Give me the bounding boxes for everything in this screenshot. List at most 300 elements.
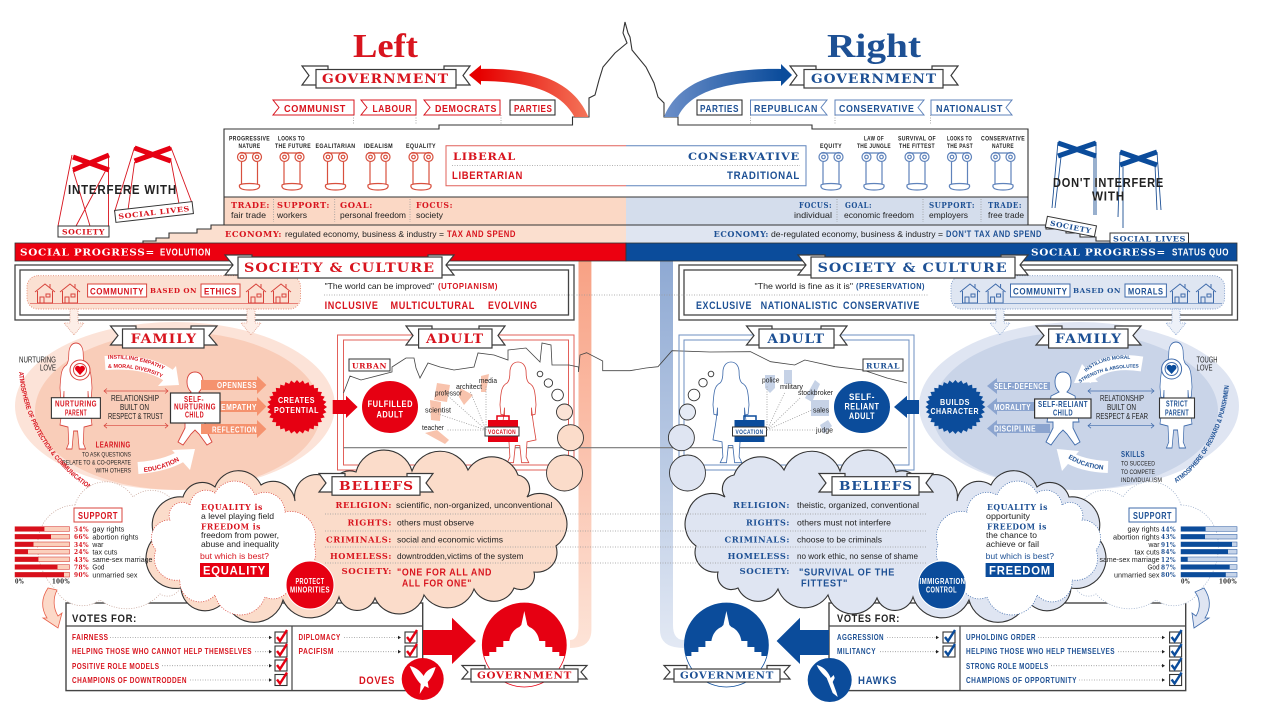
banner: right bottom government [664, 666, 790, 682]
support chart right: abortion rights [1113, 532, 1160, 541]
self-reliant child box [1035, 399, 1091, 418]
value arrows: openness, empathy, reflection: OPENNESS [217, 380, 257, 390]
vocation spokes and labels: military [780, 382, 803, 391]
learning text: TO ASK QUESTIONS [82, 452, 131, 459]
value arrows: self-defence, morality, discipline [987, 378, 1050, 437]
left salmon stripe [570, 261, 591, 648]
support chart right: 43% [1161, 533, 1176, 541]
self-reliant child box: SELF-RELIANT [1038, 399, 1088, 409]
value arrows: openness, empathy, reflection: REFLECTION [212, 424, 257, 434]
relationship text with arrows: BUILT ON [1107, 403, 1136, 412]
social progress bar: SOCIAL PROGRESS= [1031, 248, 1166, 258]
left beliefs text: HOMELESS: [330, 551, 392, 561]
right equality text: EQUALITY is [987, 503, 1048, 513]
adult figure with vocation: VOCATION [736, 430, 764, 436]
support chart left: abortion rights [92, 532, 139, 541]
right votes box: HAWKS [858, 675, 897, 687]
right votes box [808, 603, 1186, 702]
right society panel [679, 265, 1238, 320]
skills text [1121, 449, 1162, 484]
dotted arrows from community to family, left [64, 309, 261, 335]
right policy band: GOAL: [845, 200, 872, 210]
arrow: education: EDUCATION [144, 457, 180, 472]
banner: right bottom government: GOVERNMENT [680, 671, 774, 682]
ideology box: TRADITIONAL [727, 170, 800, 182]
vocation shapes [425, 374, 489, 444]
support chart right: 87% [1161, 564, 1176, 572]
support chart left: 0% [15, 578, 24, 586]
right votes box: UPHOLDING ORDER [966, 632, 1036, 642]
self-nurturing child box: NURTURING [174, 403, 216, 412]
support chart left: 54% [74, 526, 89, 534]
arrow: curved blue to right government [664, 64, 792, 117]
nurturing love label [19, 356, 56, 373]
right columns with labels: THE PAST [947, 143, 973, 150]
nurturing love label: LOVE [40, 364, 56, 373]
value arrows: self-defence, morality, discipline: SELF-DEFENCE [994, 381, 1048, 391]
ideology box: LIBERTARIAN [452, 170, 523, 182]
left society panel: INCLUSIVE [325, 300, 379, 312]
relationship text with arrows: RELATIONSHIP [111, 394, 159, 403]
left columns with labels [229, 136, 436, 190]
ideology box: LIBERAL [453, 152, 516, 163]
arrow: to self-reliant adult [894, 396, 919, 418]
banner: left government: GOVERNMENT [322, 72, 449, 87]
relationship text with arrows [1088, 388, 1154, 428]
banner: left society and culture: SOCIETY & CULTURE [244, 261, 435, 276]
right beliefs text: RIGHTS: [746, 518, 790, 528]
support chart left [15, 508, 152, 586]
parent figure: strict [1160, 342, 1192, 448]
badge: protect minorities: MINORITIES [290, 586, 330, 594]
right columns with labels: THE FITTEST [899, 143, 935, 150]
vocation spokes and labels: police [762, 376, 780, 385]
right policy band: individual [794, 210, 832, 220]
banner: left beliefs: BELIEFS [339, 478, 414, 493]
right policy band: economic freedom [844, 210, 914, 220]
self-reliant adult circle: ADULT [849, 411, 875, 422]
value arrows: openness, empathy, reflection: EMPATHY [221, 402, 257, 412]
support chart left: 90% [74, 571, 89, 579]
arrow: right support to votes [1192, 588, 1209, 628]
right votes box: HELPING THOSE WHO HELP THEMSELVES [966, 646, 1115, 656]
right adult panel [679, 335, 914, 470]
atmosphere text: ATMOSPHERE OF REWARD & PUNISHMENT [1174, 386, 1229, 483]
left beliefs cloud [146, 450, 567, 622]
right beliefs text: RELIGION: [733, 500, 790, 510]
left scaffold: interfere with society and social lives: INTERFERE WITH [68, 182, 177, 197]
support chart left: God [92, 563, 104, 572]
right equality text: achieve or fail [986, 539, 1039, 549]
left votes box: FAIRNESS [72, 632, 108, 642]
right party labels: PARTIES [700, 103, 739, 115]
right equality text [986, 503, 1054, 578]
vocation spokes and labels: scientist [425, 406, 452, 415]
rural label [863, 359, 903, 371]
right party labels: NATIONALIST [936, 103, 1003, 115]
right society panel: BASED ON [1073, 287, 1121, 295]
vocation spokes and labels: media [479, 376, 498, 385]
banner: left bottom government [462, 666, 587, 682]
right policy band: SUPPORT: [929, 200, 975, 210]
atmosphere text: ATMOSPHERE OF PROTECTION & COMMUNICATION [19, 372, 92, 488]
support chart right: 84% [1161, 548, 1176, 556]
support chart right [1100, 508, 1237, 586]
right policy band: employers [929, 210, 968, 220]
badge: builds character: CHARACTER [930, 406, 979, 416]
learning text: WITH OTHERS [96, 468, 131, 474]
vocation shapes [765, 370, 832, 434]
right votes box: CHAMPIONS OF OPPORTUNITY [966, 675, 1077, 685]
left party labels: DEMOCRATS [435, 103, 497, 115]
arrow: instilling empathy: & MORAL DIVERSITY [108, 364, 164, 378]
skills text: INDIVIDUALISM [1121, 477, 1162, 484]
right government dome [684, 603, 768, 688]
support chart left: 34% [74, 541, 89, 549]
badge: creates potential [262, 375, 332, 439]
adult figure with vocation: VOCATION [488, 430, 516, 436]
adult figure with vocation [485, 362, 536, 463]
support chart left: war [91, 540, 104, 549]
right beliefs text: no work ethic, no sense of shame [797, 551, 918, 561]
left beliefs text: RELIGION: [336, 500, 392, 510]
vocation spokes and labels: judge [815, 426, 833, 435]
left equality text: abuse and inequality [201, 539, 280, 549]
support chart right: unmarried sex [1114, 570, 1160, 579]
badge: builds character [920, 375, 991, 439]
strict parent box: PARENT [1165, 408, 1189, 418]
left policy band: society [416, 210, 444, 220]
banner: left family: FAMILY [131, 332, 197, 347]
left equality text: FREEDOM is [201, 523, 261, 533]
right columns with labels: LOOKS TO [947, 136, 972, 143]
left beliefs text: SOCIETY: [342, 566, 392, 576]
right society panel: COMMUNITY [1013, 286, 1068, 298]
banner: right society and culture: SOCIETY & CULTURE [818, 261, 1008, 276]
left scaffold: interfere with society and social lives: SOCIAL LIVES [118, 204, 190, 221]
support chart right: war [1148, 540, 1160, 549]
left equality text [200, 503, 280, 578]
support chart right: gay rights [1128, 525, 1160, 534]
right family diagram [987, 342, 1229, 484]
icon: hawk [808, 658, 852, 702]
banner: left society and culture [225, 255, 454, 278]
banner: right beliefs [819, 474, 933, 495]
left policy band: GOAL: [340, 200, 373, 210]
left columns with labels: NATURE [238, 143, 260, 150]
arrow: instilling moral strength [1074, 355, 1144, 384]
right economy line: ECONOMY: [714, 229, 769, 239]
rural label: RURAL [866, 362, 900, 370]
relationship text with arrows: RESPECT & TRUST [108, 412, 163, 421]
support chart right: tax cuts [1134, 547, 1160, 556]
left beliefs text: RIGHTS: [348, 518, 392, 528]
support chart left: gay rights [92, 525, 125, 534]
left columns with labels: THE FUTURE [275, 143, 311, 150]
left votes box: DIPLOMACY [298, 632, 341, 642]
right columns with labels: EQUITY [820, 143, 842, 150]
vocation spokes and labels: professor [435, 389, 462, 398]
right columns with labels [819, 136, 1025, 190]
left equality text: a level playing field [201, 511, 274, 521]
left beliefs text [326, 500, 553, 590]
right economy line [714, 229, 1042, 239]
left thought bubbles [537, 371, 584, 491]
left beliefs text: downtrodden,victims of the system [397, 551, 524, 561]
left policy band: SUPPORT: [277, 200, 330, 210]
arrow: instilling empathy: INSTILLING EMPATHY [108, 355, 165, 370]
right beliefs text: FITTEST" [801, 579, 848, 590]
dotted belief dividers [325, 514, 927, 563]
support chart left: 100% [52, 578, 70, 586]
left society panel: BASED ON [150, 287, 197, 295]
right beliefs text: CRIMINALS: [724, 535, 790, 545]
left equality text: but which is best? [200, 551, 269, 561]
support chart right: 44% [1161, 526, 1176, 534]
left policy band: FOCUS: [416, 200, 453, 210]
urban label: URBAN [352, 362, 387, 370]
support chart left: SUPPORT [78, 510, 118, 522]
right votes box: AGGRESSION [837, 632, 884, 642]
arrow: curved red to left government [469, 65, 588, 117]
right party labels [697, 100, 1012, 125]
left support cloud [38, 482, 179, 609]
left society panel: EVOLVING [488, 300, 538, 312]
banner: left adult: ADULT [425, 332, 484, 347]
social progress bar: EVOLUTION [160, 248, 211, 258]
capitol building outline with bands [143, 22, 1110, 243]
skills text: SKILLS [1121, 449, 1145, 459]
banner: right adult: ADULT [766, 332, 825, 347]
vocation spokes and labels: teacher [422, 423, 444, 432]
right columns with labels: NATURE [992, 143, 1014, 150]
arrow: education [1056, 449, 1108, 473]
left economy line: TAX AND SPEND [447, 229, 516, 239]
support chart left: unmarried sex [92, 570, 138, 579]
right blue stripe [660, 261, 684, 648]
ideology box: CONSERVATIVE [688, 152, 800, 163]
arrow: right votes to government [777, 618, 829, 664]
right society panel: NATIONALISTIC [761, 300, 838, 312]
value arrows: self-defence, morality, discipline: MORALITY [994, 402, 1031, 412]
left equality text: EQUALITY [203, 564, 266, 578]
left policy band: workers [276, 210, 307, 220]
banner: left government [302, 66, 470, 88]
left beliefs text: social and economic victims [397, 535, 503, 545]
right votes box: STRONG ROLE MODELS [966, 661, 1049, 671]
right scaffold: don't interfere with society and social lives [1045, 142, 1188, 244]
right beliefs text: "SURVIVAL OF THE [799, 568, 895, 579]
left policy band [231, 199, 453, 222]
left columns with labels: PROGRESSIVE [229, 136, 270, 143]
right society panel: "The world is fine as it is" [754, 281, 853, 291]
right support cloud [1077, 482, 1218, 609]
badge: creates potential: CREATES [278, 395, 315, 405]
support chart right: 80% [1161, 571, 1176, 579]
right beliefs text: theistic, organized, conventional [797, 500, 919, 510]
right beliefs text: HOMELESS: [728, 551, 790, 561]
left votes box: POSITIVE ROLE MODELS [72, 661, 160, 671]
right economy line: DON'T TAX AND SPEND [946, 229, 1042, 239]
right party labels: CONSERVATIVE [839, 103, 914, 115]
banner: left beliefs [319, 474, 433, 495]
left economy line: regulated economy, business & industry = [285, 229, 444, 239]
right columns with labels: THE JUNGLE [857, 143, 891, 150]
left economy line [225, 229, 516, 239]
support chart right: 12% [1161, 556, 1176, 564]
left votes box: PACIFISM [298, 646, 334, 656]
self-reliant adult circle: SELF- [849, 392, 875, 403]
right beliefs text: others must not interfere [797, 518, 891, 528]
right scaffold: don't interfere with society and social lives: SOCIETY [1049, 219, 1093, 236]
arrow: education [138, 449, 195, 474]
left society panel: MULTICULTURAL [390, 300, 475, 312]
left beliefs text: CRIMINALS: [326, 535, 392, 545]
self-nurturing child box [170, 393, 220, 423]
arrow: left votes to government [423, 618, 476, 664]
right beliefs cloud [685, 450, 1106, 622]
right beliefs text [724, 500, 919, 590]
left votes box: HELPING THOSE WHO CANNOT HELP THEMSELVES [72, 646, 252, 656]
tough love label [1196, 356, 1218, 373]
left columns with labels: EQUALITY [406, 143, 436, 150]
left society panel [15, 265, 574, 320]
support chart right: SUPPORT [1133, 510, 1172, 522]
right beliefs text: SOCIETY: [740, 566, 790, 576]
support chart left: 24% [74, 548, 89, 556]
self-reliant adult circle: RELIANT [844, 402, 880, 412]
badge: creates potential: POTENTIAL [274, 405, 319, 415]
self-reliant child box: CHILD [1053, 408, 1073, 418]
badge: builds character: BUILDS [940, 397, 970, 407]
left equality text: freedom from power, [201, 530, 279, 540]
right society panel: CONSERVATIVE [843, 300, 920, 312]
learning text: RELATE TO & CO-OPERATE [62, 460, 131, 466]
left beliefs text: ALL FOR ONE" [402, 579, 472, 590]
child figure [178, 372, 212, 445]
title: Right: Right [827, 28, 922, 65]
value arrows: openness, empathy, reflection [201, 376, 266, 438]
right equality text: but which is best? [986, 551, 1054, 561]
right scaffold: don't interfere with society and social lives: DON'T INTERFERE [1053, 175, 1164, 190]
nurturing love label: NURTURING [19, 356, 56, 365]
banner: right society and culture [798, 255, 1028, 278]
urban label [349, 359, 390, 371]
badge: protect minorities [286, 561, 334, 609]
left votes box: CHAMPIONS OF DOWNTRODDEN [72, 675, 187, 685]
right society panel: EXCLUSIVE [696, 300, 752, 312]
right equality cloud [936, 481, 1101, 615]
badge: immigration control [918, 561, 966, 609]
tough love label: TOUGH [1196, 356, 1218, 365]
title: Left: Left [353, 28, 419, 65]
left columns with labels: IDEALISM [364, 143, 393, 150]
arrow: instilling moral strength: INSTILLING MORAL [1084, 356, 1130, 372]
badge: protect minorities: PROTECT [296, 577, 324, 586]
left society panel: "The world can be improved" [325, 281, 434, 291]
right policy band: TRADE: [988, 200, 1022, 210]
skills text: TO COMPETE [1121, 469, 1155, 476]
right policy band [794, 199, 1024, 222]
arrow: education: EDUCATION [1068, 454, 1104, 470]
left equality text: EQUALITY is [201, 503, 263, 513]
right scaffold: don't interfere with society and social lives: SOCIAL LIVES [1113, 234, 1186, 244]
right equality text: FREEDOM is [987, 523, 1047, 533]
social progress bar: SOCIAL PROGRESS= [20, 248, 155, 258]
banner: left adult [406, 326, 505, 348]
support chart right: same-sex marriage [1100, 555, 1160, 564]
left party labels: PARTIES [514, 103, 552, 115]
vocation spokes and labels [762, 376, 833, 435]
left party labels: COMMUNIST [284, 103, 346, 115]
right family ellipse [919, 322, 1239, 490]
right equality text: the chance to [986, 530, 1037, 540]
right economy line: de-regulated economy, business & industry = [771, 229, 943, 239]
badge: immigration control: IMMIGRATION [920, 577, 966, 586]
vocation spokes and labels: stockbroker [798, 388, 833, 397]
relationship text with arrows [104, 388, 168, 428]
icon: dove [402, 658, 444, 700]
banner: left bottom government: GOVERNMENT [477, 671, 572, 682]
vocation spokes and labels: sales [813, 406, 829, 415]
left society panel: (UTOPIANISM) [438, 281, 498, 291]
left society panel: COMMUNITY [90, 286, 144, 298]
support chart left: 43% [74, 556, 89, 564]
self-reliant adult circle [834, 381, 890, 433]
right society panel: (PRESERVATION) [856, 281, 925, 291]
support chart left: 66% [74, 533, 89, 541]
left policy band: TRADE: [231, 200, 270, 210]
dotted arrows from community to family, right [990, 309, 1186, 335]
right votes box: MILITANCY [837, 646, 876, 656]
vocation spokes and labels [422, 376, 498, 432]
left votes box [66, 603, 444, 700]
relationship text with arrows: RESPECT & FEAR [1096, 412, 1148, 421]
skills text: TO SUCCEED [1121, 461, 1155, 468]
right policy band: FOCUS: [799, 200, 832, 210]
support chart left: 78% [74, 564, 89, 572]
social progress bar [15, 243, 1237, 261]
left votes box: DOVES [359, 675, 395, 687]
banner: right beliefs: BELIEFS [839, 478, 913, 493]
relationship text with arrows: RELATIONSHIP [1100, 394, 1144, 403]
banner: right family: FAMILY [1055, 332, 1122, 347]
left economy line: ECONOMY: [225, 229, 282, 239]
left columns with labels: LOOKS TO [278, 136, 305, 143]
left beliefs text: scientific, non-organized, unconventional [396, 500, 553, 510]
self-nurturing child box: SELF- [184, 395, 204, 404]
support chart right: God [1148, 563, 1160, 572]
right columns with labels: CONSERVATIVE [981, 136, 1025, 143]
left family ellipse [15, 322, 335, 490]
left society panel: ETHICS [204, 286, 237, 298]
self-nurturing child box: CHILD [185, 410, 204, 420]
right scaffold: don't interfere with society and social lives: WITH [1092, 189, 1125, 204]
parent figure: nurturing [60, 343, 92, 449]
banner: right government [790, 66, 958, 88]
relationship text with arrows: BUILT ON [120, 403, 149, 412]
banner: left family [110, 326, 217, 348]
support chart left: tax cuts [92, 547, 118, 556]
adult figure with vocation [713, 362, 766, 463]
left party labels [273, 100, 555, 125]
nurturing parent box [51, 398, 100, 418]
banner: right family [1036, 326, 1141, 348]
child figure [1046, 372, 1080, 445]
right beliefs text: choose to be criminals [797, 535, 882, 545]
right columns with labels: SURVIVAL OF [898, 136, 936, 143]
atmosphere text [1174, 386, 1229, 483]
